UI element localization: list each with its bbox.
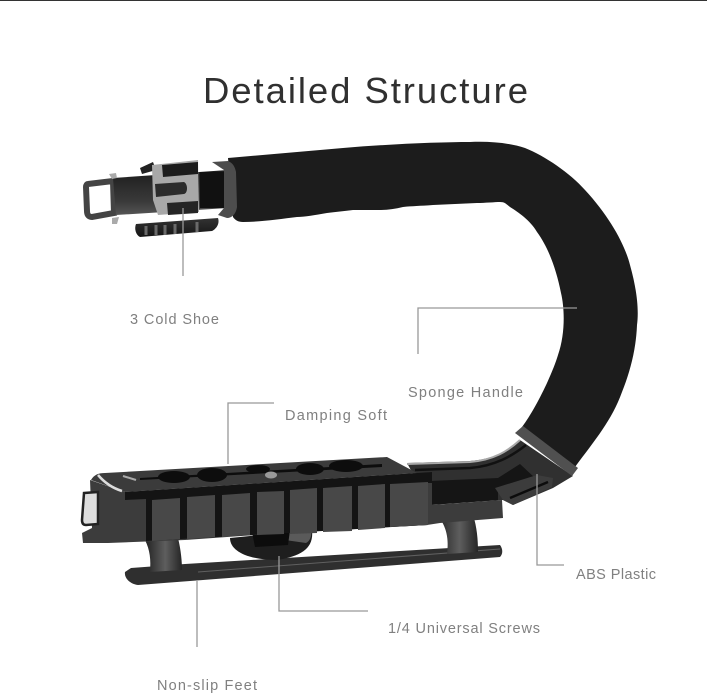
right foot tab xyxy=(437,515,478,554)
label: damping soft: Damping Soft xyxy=(285,408,387,424)
label: 3 cold shoe: 3 Cold Shoe xyxy=(130,312,219,328)
top clip xyxy=(140,162,156,174)
brand mark xyxy=(123,476,136,480)
sponge handle grip xyxy=(228,142,638,467)
handle collar xyxy=(515,426,578,476)
screw head xyxy=(265,472,277,478)
silver accent xyxy=(98,475,122,491)
slots xyxy=(140,460,382,483)
leader: abs plastic xyxy=(537,474,564,565)
label: universal screws: 1/4 Universal Screws xyxy=(388,621,540,637)
quarter inch screw xyxy=(230,530,312,560)
silver shoe xyxy=(152,160,199,215)
abs plastic bracket xyxy=(407,440,573,505)
side face xyxy=(82,472,503,543)
bottom foot plate xyxy=(125,515,502,585)
loop clips xyxy=(109,173,119,224)
top surface xyxy=(91,457,417,492)
top rail plate xyxy=(82,457,503,543)
left foot tab xyxy=(145,538,182,572)
cold shoe mount xyxy=(86,160,237,237)
dark band and block gaps xyxy=(125,472,432,541)
label: sponge handle: Sponge Handle xyxy=(408,385,523,401)
title: Detailed Structure xyxy=(203,70,528,111)
label: non-slip feet: Non-slip Feet xyxy=(157,678,257,694)
leader: non-slip feet xyxy=(196,581,198,647)
top border xyxy=(0,0,707,1)
collar xyxy=(212,161,237,218)
leader: sponge handle xyxy=(418,308,577,354)
rear loop xyxy=(86,181,114,217)
leader: 3 cold shoe xyxy=(182,208,184,276)
leader: damping soft xyxy=(228,403,274,464)
label: abs plastic: ABS Plastic xyxy=(576,567,656,583)
mount body xyxy=(113,170,228,215)
bracket clip xyxy=(495,475,553,505)
wheel xyxy=(135,218,219,237)
foot bar xyxy=(125,545,502,585)
side rail blocks xyxy=(152,482,428,541)
leader: universal screws xyxy=(279,556,368,611)
left end loop xyxy=(82,492,98,525)
